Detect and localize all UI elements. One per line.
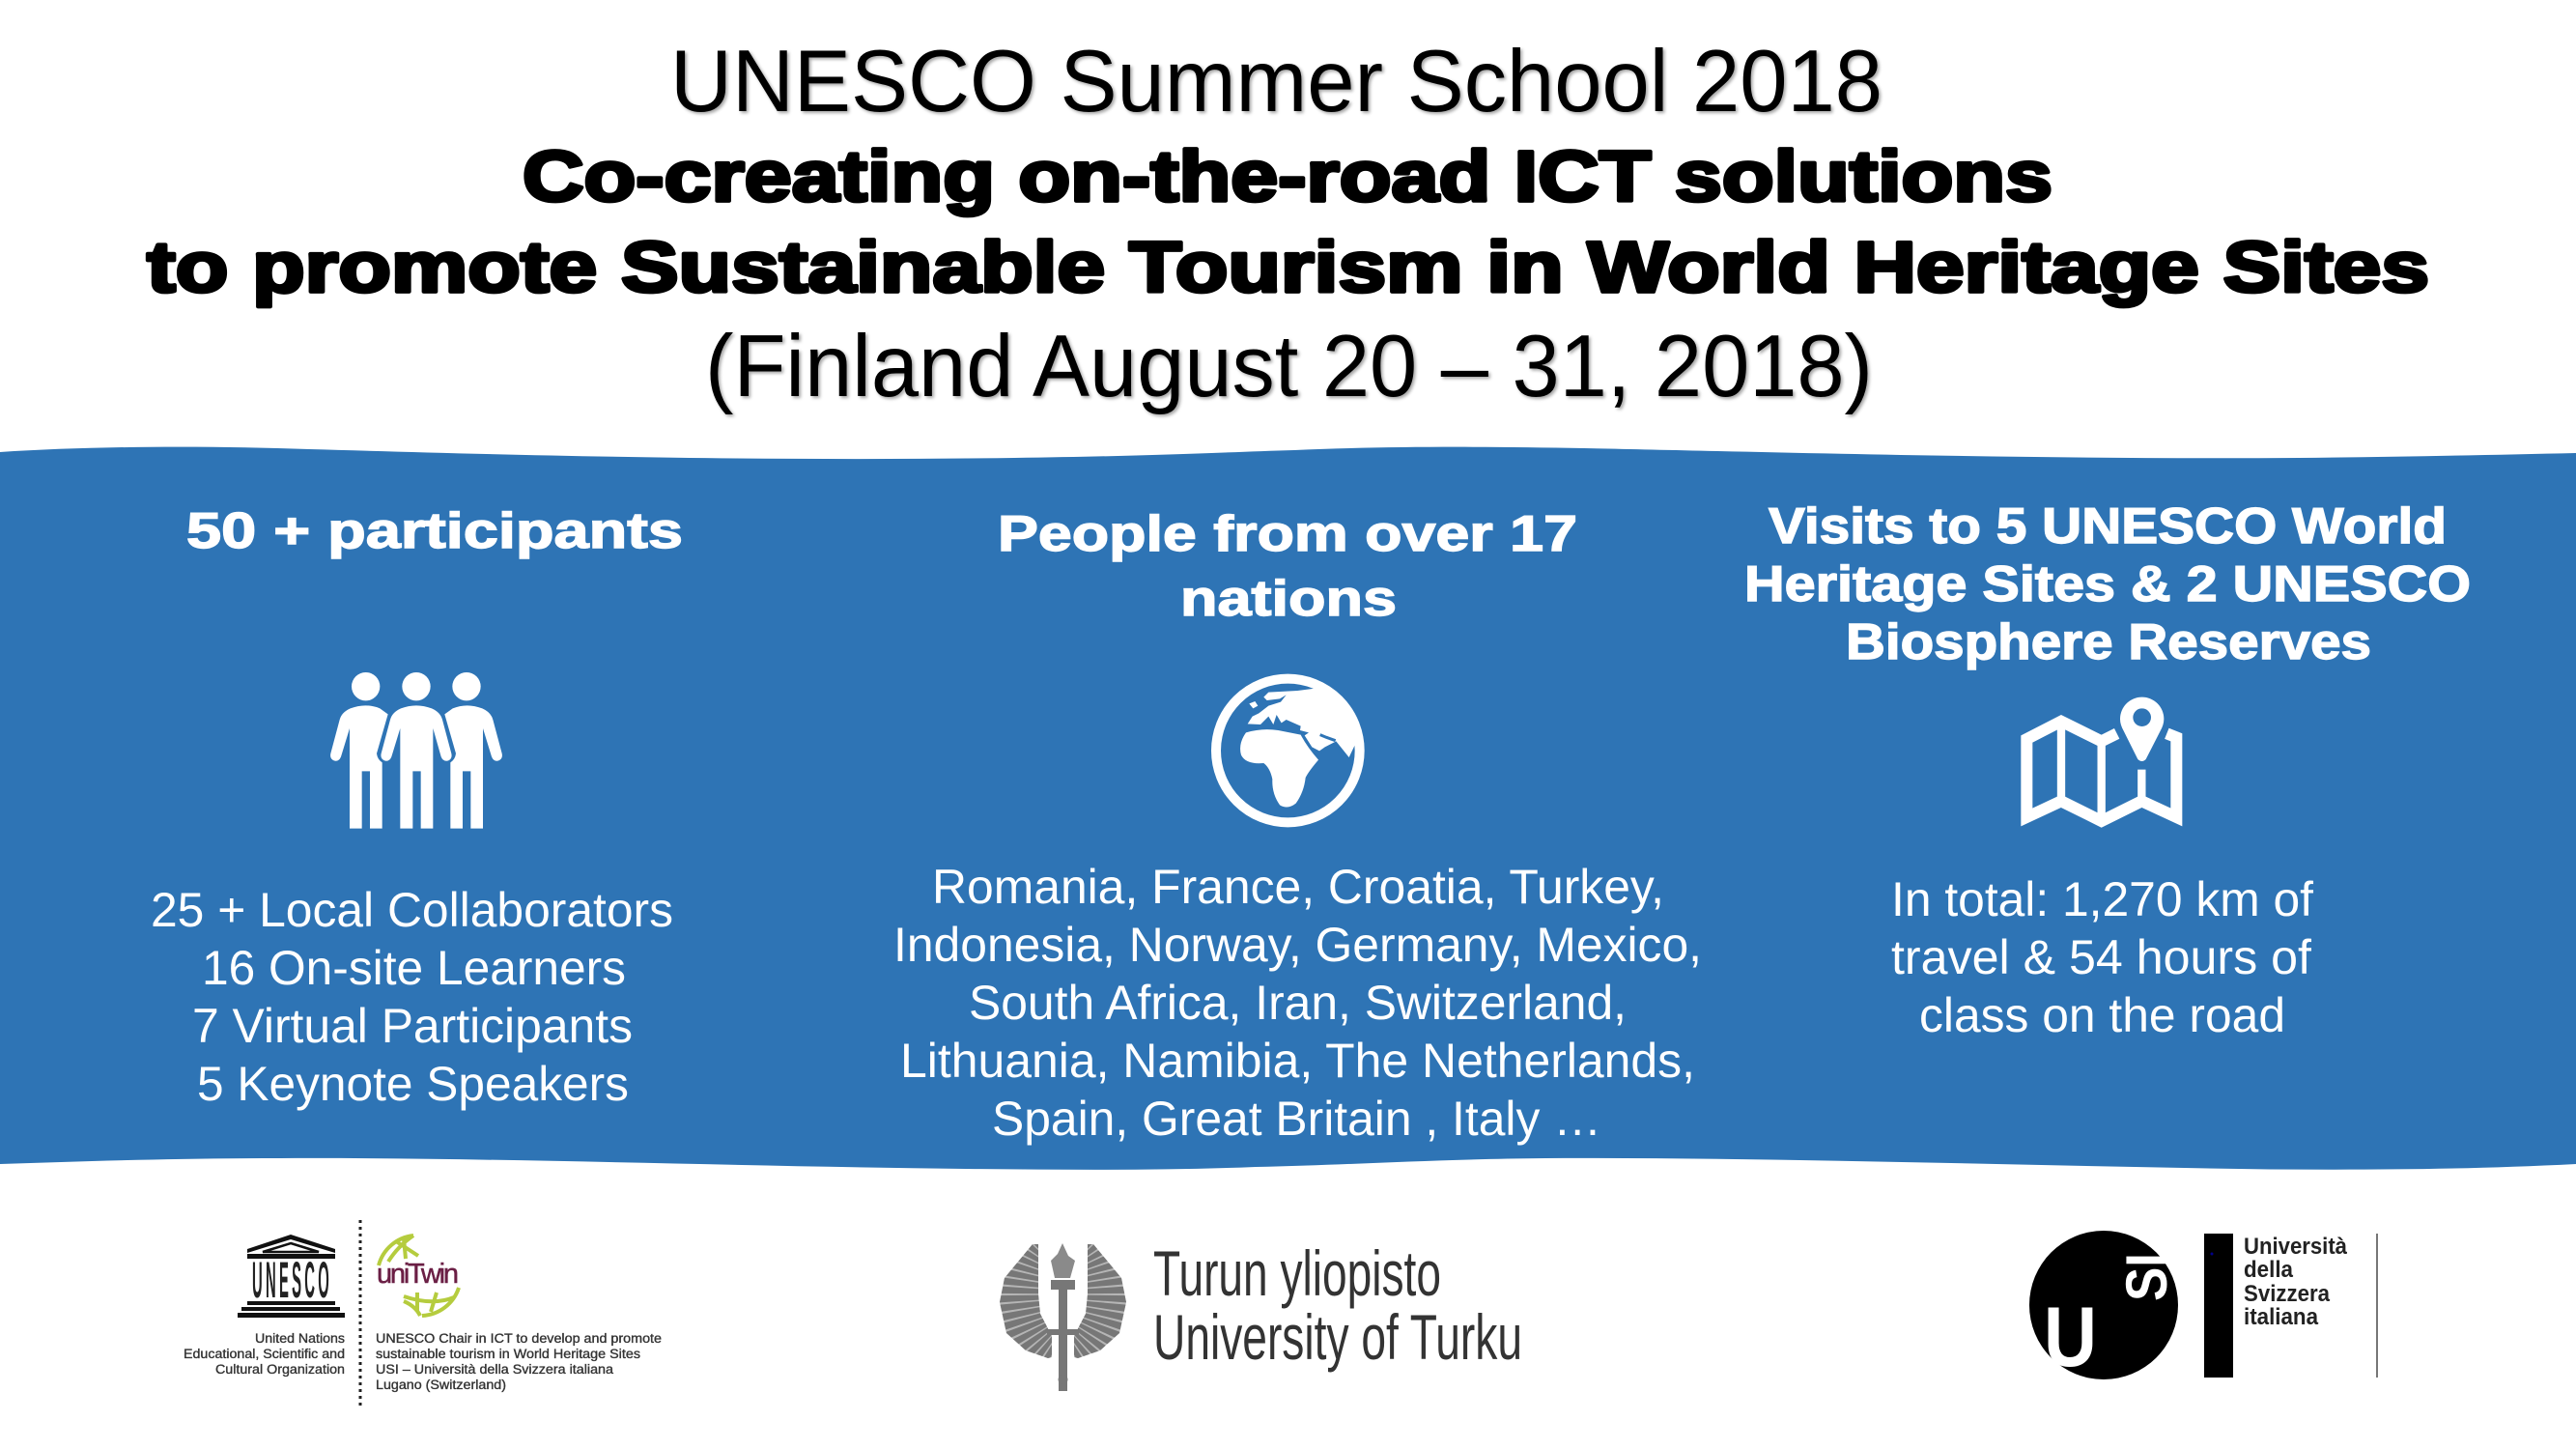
text: participant breakdown (151, 883, 673, 1111)
panel: participants (151, 503, 683, 1111)
panel: visits (1744, 498, 2471, 1042)
text: participant breakdown: 7 Virtual Participants (192, 999, 633, 1053)
text: travel totals: class on the road (1919, 988, 2285, 1042)
USI black bar (2204, 1234, 2233, 1378)
logo: University of Turku (995, 1236, 1522, 1391)
UNESCO caption: United Nations (255, 1331, 345, 1346)
heading: Visits to World Heritage Sites (1744, 498, 2471, 670)
USI wordmark: Università (2244, 1234, 2348, 1260)
UniTwin globe and wordmark: uniTwin (377, 1259, 459, 1290)
dotted divider (359, 1220, 361, 1409)
text: list of countries: Romania, France, Croatia, Turkey, (932, 860, 1664, 914)
text: list of countries: South Africa, Iran, Switzerland, (969, 976, 1627, 1030)
heading: Visits to World Heritage Sites: Heritage Sites & 2 UNESCO (1744, 556, 2471, 612)
logo: USI (2029, 1231, 2377, 1384)
panel: nations (893, 506, 1702, 1146)
USI wordmark: della (2244, 1257, 2294, 1283)
heading: People from over 17 nations: People from over 17 (998, 506, 1577, 562)
icon: map with pin (2026, 697, 2176, 821)
UNESCO caption: Cultural Organization (215, 1362, 345, 1377)
USI circle mark: SI (2114, 1253, 2179, 1301)
UNESCO Chair caption: Lugano (Switzerland) (376, 1378, 506, 1392)
UNESCO Chair caption: USI – Università della Svizzera italiana (376, 1362, 614, 1377)
wordmark (1153, 1237, 1522, 1373)
UNESCO Chair caption: sustainable tourism in World Heritage Sites (376, 1347, 640, 1361)
text: participant breakdown: 5 Keynote Speakers (197, 1057, 629, 1111)
UNESCO caption: Educational, Scientific and (184, 1347, 345, 1361)
heading: People from over 17 nations (998, 506, 1577, 627)
heading: People from over 17 nations: nations (1180, 571, 1397, 627)
USI wordmark: Svizzera (2244, 1281, 2331, 1307)
blue wave band (0, 447, 2576, 1170)
USI wordmark (2244, 1234, 2348, 1330)
UNESCO caption (184, 1331, 345, 1377)
wordmark: Turun yliopisto (1153, 1237, 1441, 1309)
USI circle mark (2029, 1231, 2179, 1384)
heading: Visits to World Heritage Sites: Visits to 5 UNESCO World (1769, 498, 2447, 554)
UniTwin globe and wordmark (377, 1236, 459, 1316)
heading: Visits to World Heritage Sites: Biosphere Reserves (1846, 614, 2371, 670)
title block (147, 33, 2429, 415)
wordmark: University of Turku (1153, 1301, 1522, 1373)
text: travel totals: travel & 54 hours of (1891, 930, 2311, 984)
text: participant breakdown: 25 + Local Collaborators (151, 883, 673, 937)
logo: UNESCO / UniTwin (184, 1220, 662, 1409)
emblem: wings and torch (1000, 1243, 1126, 1391)
text: travel totals: In total: 1,270 km of (1891, 872, 2313, 926)
text: list of countries (893, 860, 1702, 1146)
UNESCO temple (238, 1235, 345, 1318)
heading: 50 + participants: 50 + participants (186, 503, 683, 559)
text: list of countries: Indonesia, Norway, Germany, Mexico, (893, 918, 1702, 972)
title line: to promote: to promote Sustainable Tourism in World Heritage Sites (147, 227, 2429, 307)
icon: globe (1216, 679, 1365, 822)
text: travel totals (1891, 872, 2313, 1042)
title line: dates: (Finland August 20 – 31, 2018) (705, 318, 1873, 415)
text: list of countries: Spain, Great Britain , Italy … (992, 1092, 1601, 1146)
UNESCO Chair caption (376, 1331, 662, 1392)
title line: Co-creating: Co-creating on-the-road ICT solutions (523, 136, 2052, 216)
text: participant breakdown: 16 On-site Learners (202, 941, 626, 995)
UNESCO temple: UNESCO (252, 1253, 329, 1309)
title line: UNESCO Summer School 2018: UNESCO Summer School 2018 (670, 33, 1882, 130)
UNESCO Chair caption: UNESCO Chair in ICT to develop and promote (376, 1331, 662, 1346)
text: list of countries: Lithuania, Namibia, The Netherlands, (900, 1034, 1695, 1088)
USI wordmark: italiana (2244, 1304, 2319, 1330)
USI circle mark: U (2044, 1289, 2097, 1384)
icon: three people (330, 672, 502, 829)
